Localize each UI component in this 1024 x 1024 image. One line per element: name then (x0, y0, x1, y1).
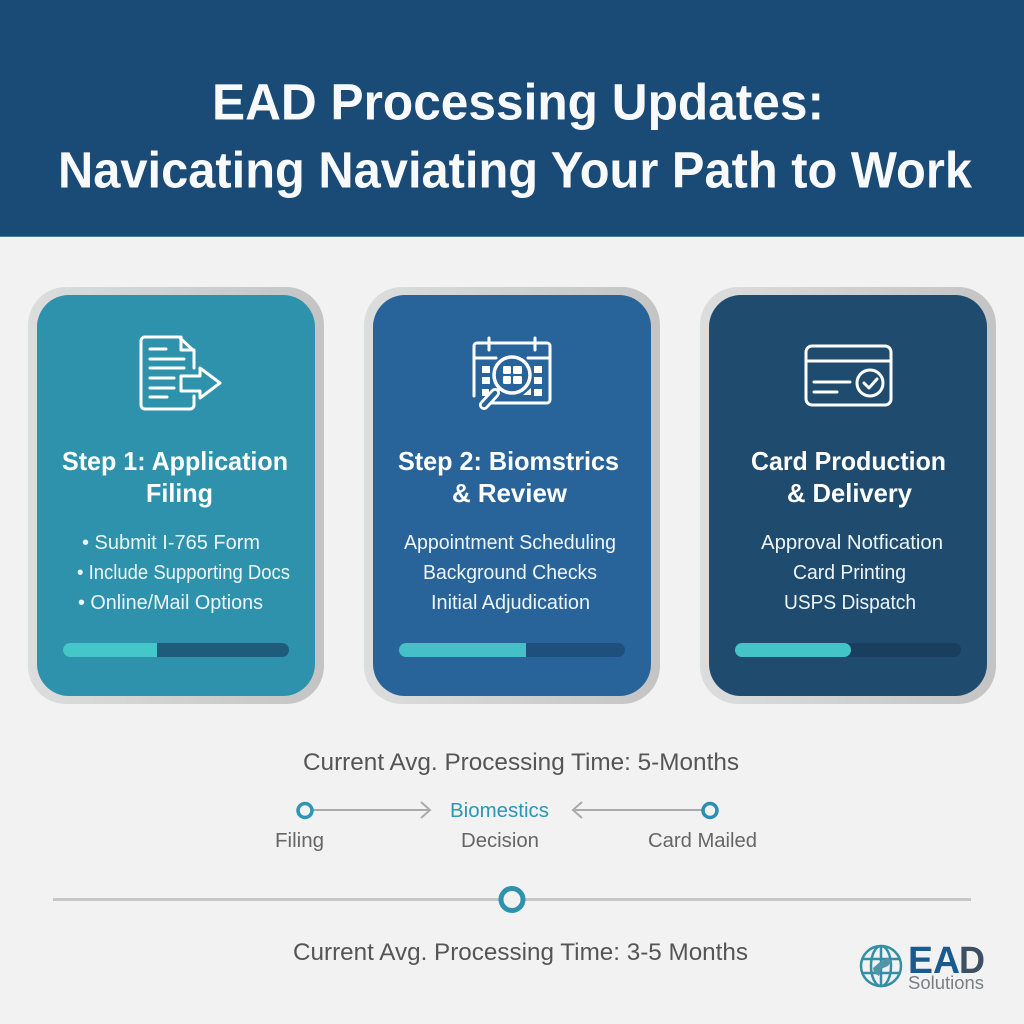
processing time caption: 5-months: Current Avg. Processing Time: 5-Months (303, 749, 739, 776)
icon: document with arrow (141, 337, 220, 409)
icon: calendar with magnifier (474, 338, 550, 405)
step 2 list: Background Checks (423, 562, 597, 584)
card production heading: Card Production (751, 446, 946, 476)
title (58, 74, 973, 198)
label: card mailed: Card Mailed (648, 830, 757, 852)
arrow: filing to biometrics (312, 802, 430, 818)
step 2 list: Appointment Scheduling (404, 532, 616, 554)
step 1 bullet list: • Submit I-765 Form (82, 532, 260, 554)
step 1 bullet list (77, 532, 290, 614)
node: filing (298, 804, 312, 818)
icon: globe (861, 946, 901, 986)
title: Navicating Naviating Your Path to Work (58, 142, 973, 198)
step 2 list (404, 532, 616, 614)
label: filing: Filing (275, 830, 324, 852)
title: EAD Processing Updates: (212, 74, 824, 130)
step 1 heading (62, 446, 288, 508)
logo wordmark: EA (908, 940, 960, 982)
timeline with filing, biometrics, decision and card mailed (275, 800, 757, 852)
step 1 progress bar (63, 643, 289, 657)
card production progress bar (735, 643, 961, 657)
header banner (0, 0, 1024, 237)
step 1 heading: Step 1: Application (62, 446, 288, 476)
step 1 heading: Filing (146, 478, 213, 508)
step 2 heading: & Review (452, 478, 568, 508)
arrow: card mailed to biometrics (573, 802, 703, 818)
icon: card with check mark (806, 346, 891, 405)
step 2 heading: Step 2: Biomstrics (398, 446, 619, 476)
step 2 list: Initial Adjudication (431, 592, 590, 614)
logo: EAD Solutions (861, 940, 985, 993)
card production list: Card Printing (793, 562, 906, 584)
logo wordmark (908, 940, 985, 993)
card production heading (751, 446, 946, 508)
card production list (761, 532, 943, 614)
card production list: Approval Notfication (761, 532, 943, 554)
panel: step 2 biometrics and review (364, 287, 660, 704)
logo wordmark: D (959, 940, 985, 982)
label: biomestics: Biomestics (450, 800, 549, 822)
label: decision: Decision (461, 830, 539, 852)
overall progress line with marker (53, 888, 971, 910)
panel: step 1 application filing (28, 287, 324, 704)
step 2 heading (398, 446, 619, 508)
step 1 bullet list: • Include Supporting Docs (77, 562, 290, 584)
card production list: USPS Dispatch (784, 592, 916, 614)
step 2 progress bar (399, 643, 625, 657)
logo wordmark: Solutions (908, 973, 984, 993)
node: card mailed (703, 804, 717, 818)
panel: card production and delivery (700, 287, 996, 704)
step 1 bullet list: • Online/Mail Options (78, 592, 263, 614)
card production heading: & Delivery (787, 478, 913, 508)
processing time caption: 3-5 months: Current Avg. Processing Time: 3-5 Months (293, 939, 748, 966)
